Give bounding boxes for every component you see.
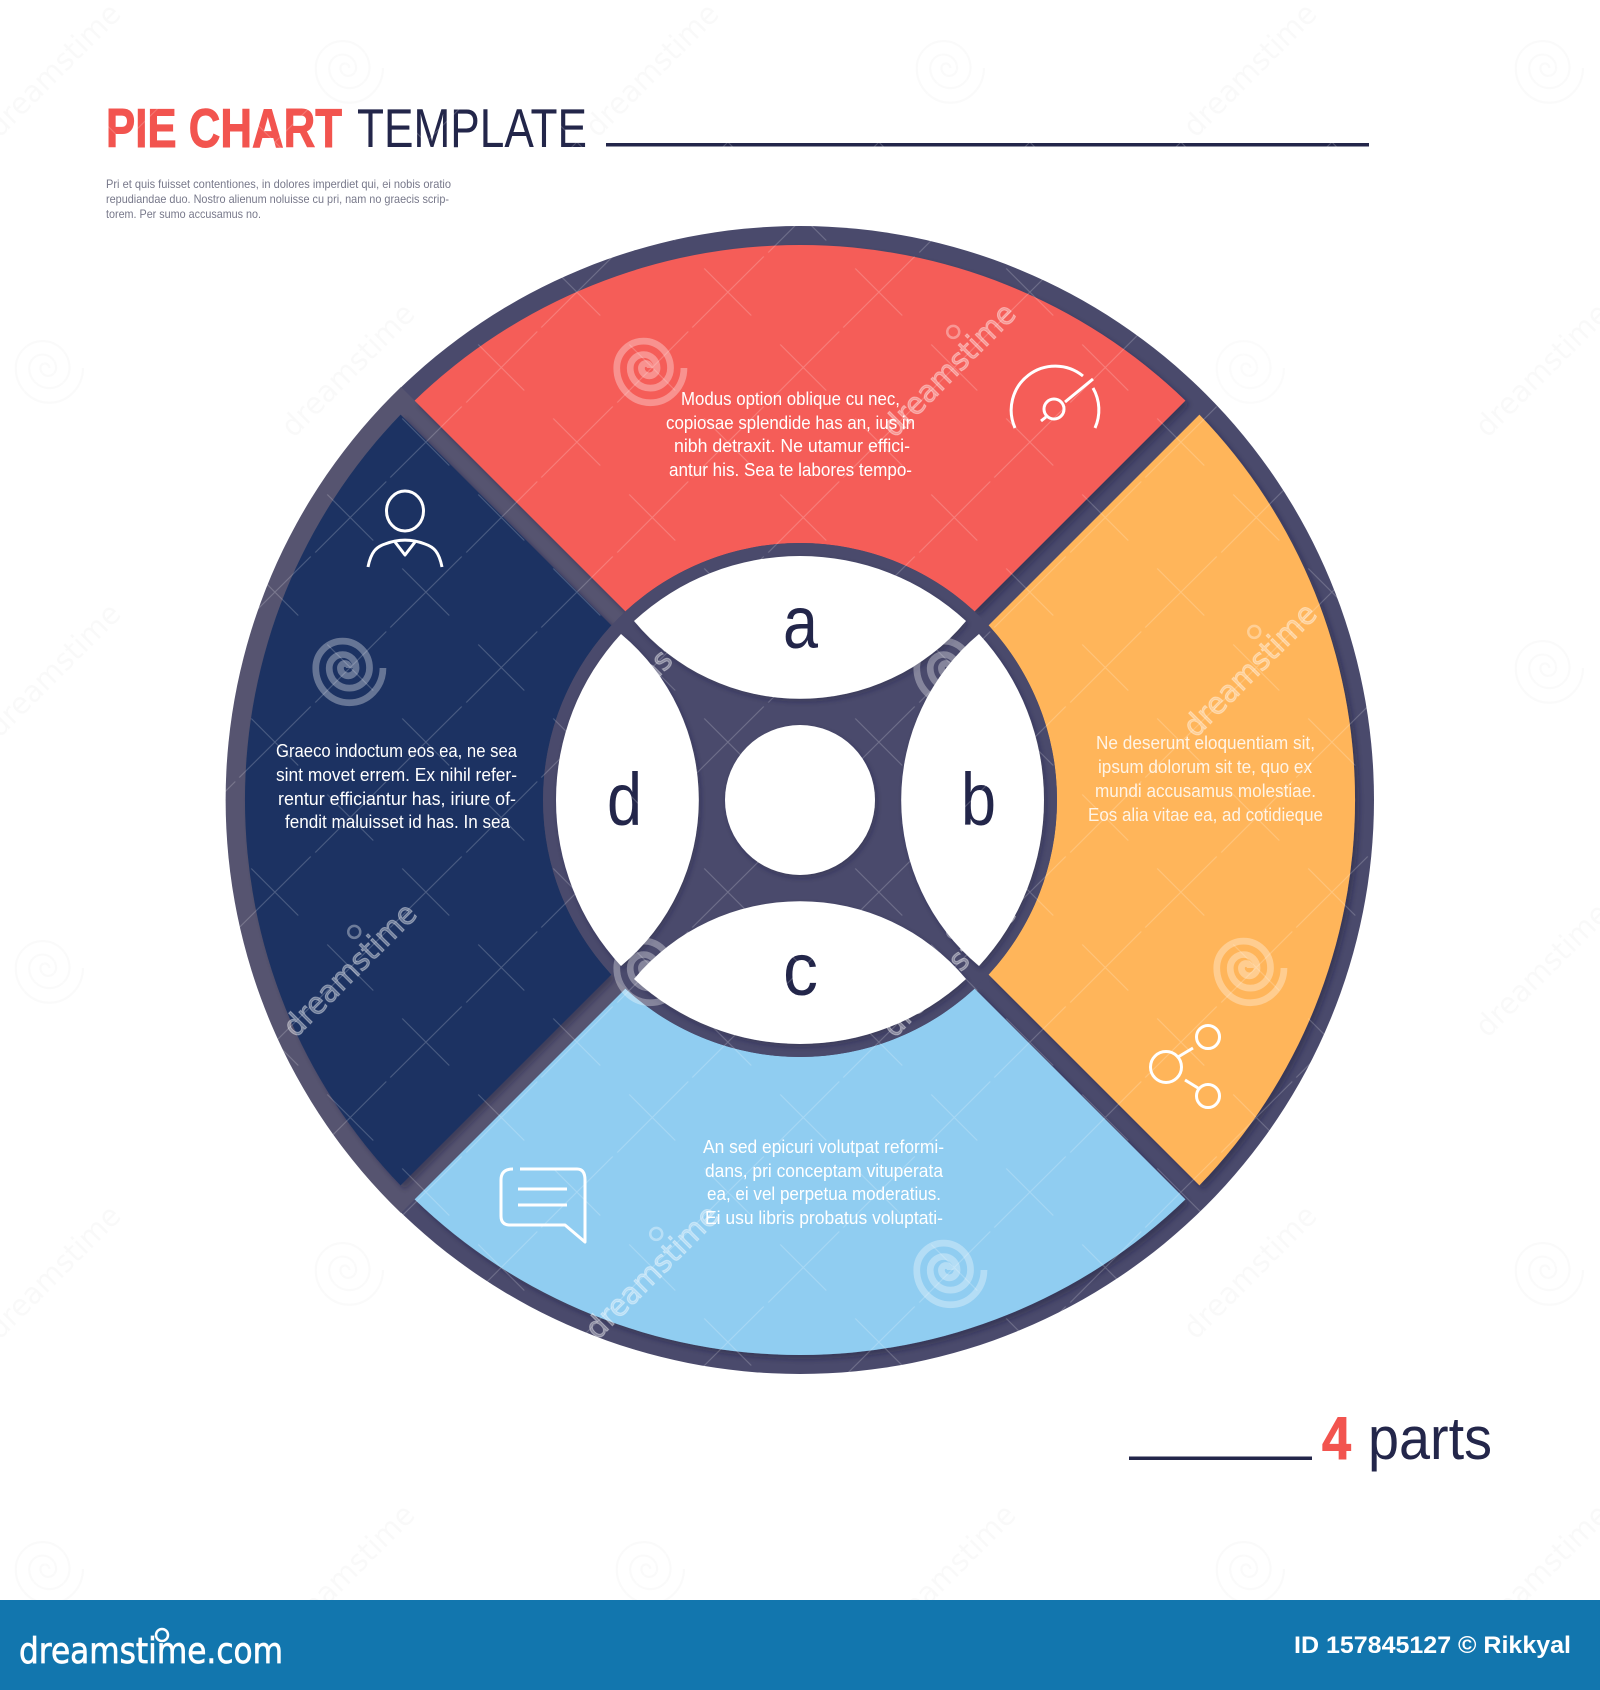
text block: sector c (703, 1137, 944, 1228)
sector d: navy (245, 415, 611, 1185)
letter c: c (783, 928, 818, 1011)
text block: sector d: rentur efficiantur has, iriure of- (278, 789, 516, 809)
text block: sector b: ipsum dolorum sit te, quo ex (1098, 757, 1312, 777)
footer logo: dreamstime.com (19, 1631, 283, 1672)
footer credit: ID 157845127 © Rikkyal (1294, 1632, 1571, 1659)
intro text: torem. Per sumo accusamus no. (106, 207, 261, 221)
text block: sector d: Graeco indoctum eos ea, ne sea (276, 741, 518, 761)
center circle (725, 725, 875, 875)
intro text: Pri et quis fuisset contentiones, in dolores imperdiet qui, ei nobis oratio (106, 177, 451, 191)
text block: sector d: sint movet errem. Ex nihil refer- (276, 765, 517, 785)
sector c: light blue (415, 989, 1185, 1355)
text block: sector d (276, 741, 518, 832)
title: TEMPLATE (357, 97, 587, 159)
title: PIE CHART (106, 97, 342, 159)
icon: person (368, 491, 442, 567)
text block: sector b: Ne deserunt eloquentiam sit, (1096, 733, 1315, 753)
outer dark ring (226, 226, 1374, 1374)
sector a: red (415, 245, 1185, 611)
watermark wordmarks over chart (267, 287, 1324, 1346)
parts label (1322, 1405, 1492, 1472)
text block: sector b (1088, 733, 1323, 825)
text block: sector c: An sed epicuri volutpat reformi- (703, 1137, 944, 1157)
text block: sector a: nibh detraxit. Ne utamur effici- (674, 436, 910, 456)
text block: sector d: fendit maluisset id has. In sea (285, 812, 511, 832)
parts rule (1129, 1456, 1312, 1460)
text block: sector a: copiosae splendide has an, ius in (666, 413, 915, 433)
intro text (106, 177, 451, 221)
sector b: orange (989, 415, 1355, 1185)
parts label: 4 (1322, 1405, 1352, 1472)
footer bar (0, 1600, 1600, 1690)
watermark spirals over chart (316, 341, 1284, 1305)
text block: sector c: ea, ei vel perpetua moderatius. (707, 1184, 941, 1204)
text block: sector b: mundi accusamus molestiae. (1095, 781, 1316, 801)
text block: sector a: Modus option oblique cu nec, (681, 389, 900, 409)
title rule (606, 143, 1369, 146)
icon: chat bubble (501, 1169, 585, 1242)
icon: gauge (1011, 366, 1099, 428)
sectors (245, 245, 1355, 1355)
inner lenses (556, 556, 1044, 1044)
text block: sector c: dans, pri conceptam vituperata (705, 1161, 944, 1181)
letter a: a (783, 581, 819, 664)
parts label: parts (1368, 1405, 1492, 1472)
title (106, 97, 587, 159)
lighter ring behind left sector (226, 387, 814, 1213)
icon: share (1150, 1026, 1220, 1108)
letter b: b (961, 758, 996, 841)
letter d: d (607, 758, 642, 841)
text block: sector b: Eos alia vitae ea, ad cotidieque (1088, 805, 1323, 825)
inner dark disc (543, 543, 1057, 1057)
text block: sector a: antur his. Sea te labores tempo- (669, 460, 912, 480)
text block: sector c: Ei usu libris probatus voluptati- (705, 1208, 943, 1228)
pie chart (226, 226, 1374, 1374)
text block: sector a (666, 389, 915, 480)
intro text: repudiandae duo. Nostro alienum noluisse cu pri, nam no graecis scrip- (106, 192, 449, 206)
